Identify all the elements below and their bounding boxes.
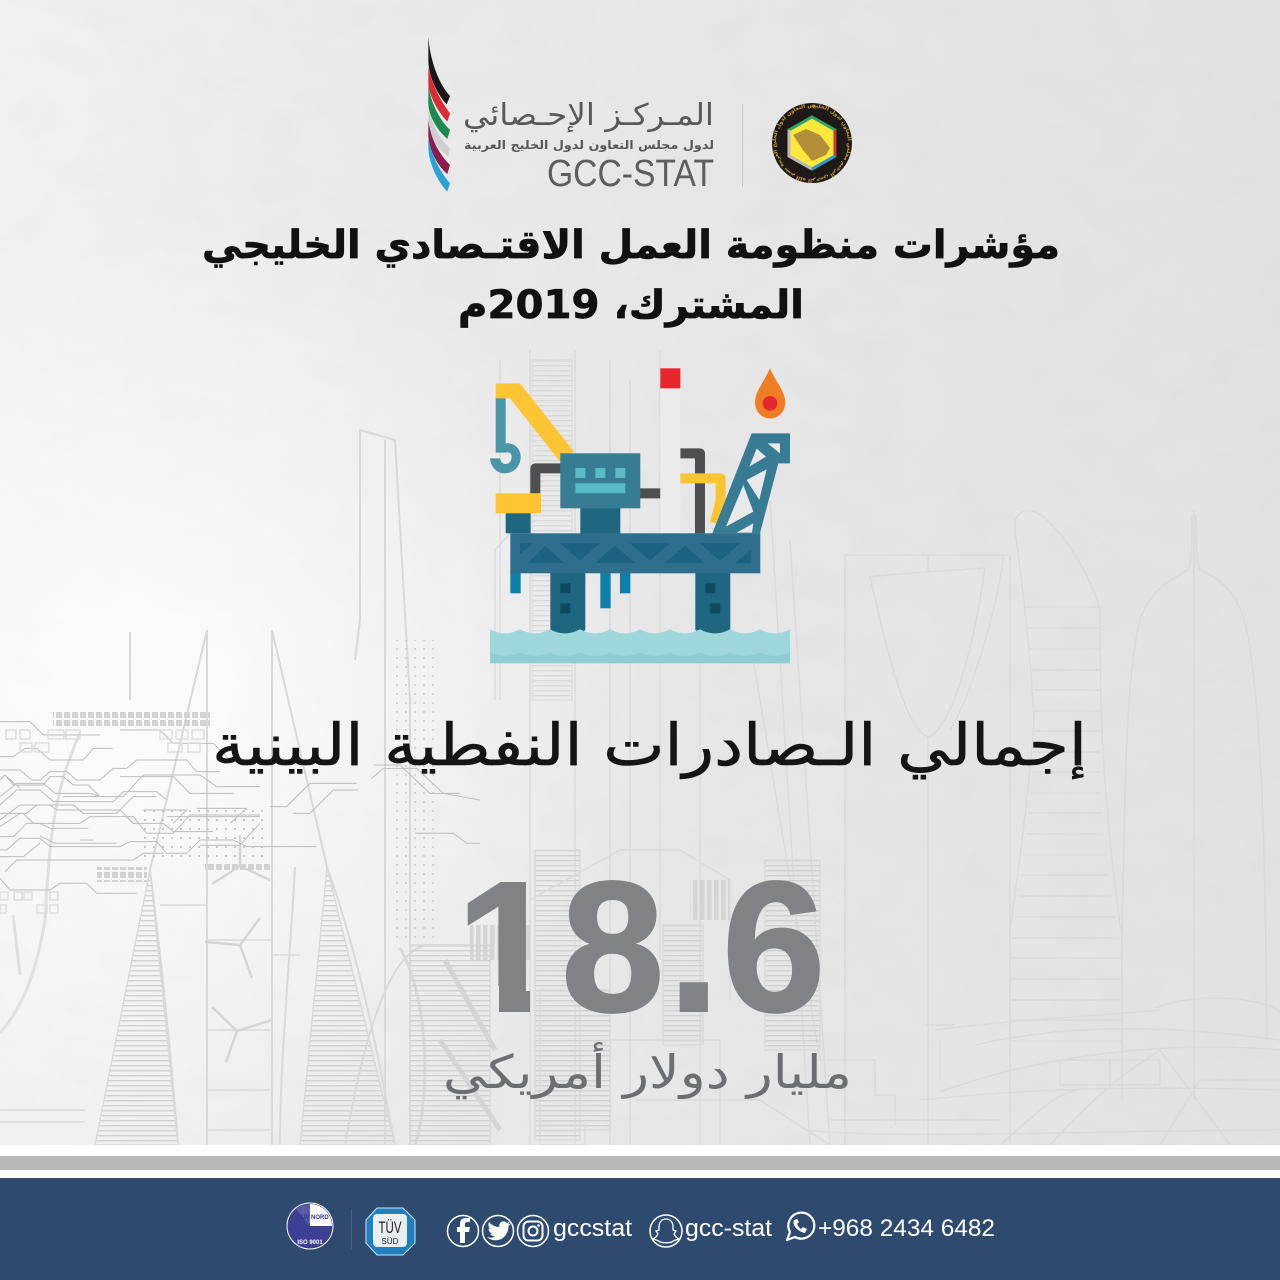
icon: grey pipes [535,453,700,533]
skyline: circuit solder pads [53,712,270,882]
title line 1: مؤشرات منظومة العمل الاقتـصادي الخليجي [202,223,1060,268]
icon: twitter [482,1216,514,1246]
badge: TUV Nord ISO 9001: TUV NORD [297,1215,329,1221]
skyline: torch tower [1010,511,1122,1100]
icon: sea [490,629,790,663]
icon: crane hook [490,398,521,473]
skyline: sail building [845,555,1010,1145]
heading: total intra-GCC oil exports: إجمالي الـصادرات النفطية البينية [212,711,1087,780]
icon: drill pipes [510,572,630,608]
icon: yellow tank [496,493,541,533]
header logo group [428,37,852,195]
title line 2: المشترك، 2019م [458,283,804,328]
logo: GCC emblem: مجلس التعاون لدول الخليج العربية بسم الله الرحمن الرحيم مجلس التعاون لدول الخليج [772,104,852,184]
icon: crane arm [496,383,574,462]
badge: TUV SUD: TÜV [378,1218,402,1237]
icon: derrick [712,433,790,533]
skyline: circuit board traces [0,722,480,893]
unit label: مليار دولار أمريكي [443,1042,852,1100]
big number: 18.6 [456,844,825,1051]
handle: gcc-stat: gcc-stat [685,1215,772,1242]
skyline: central towers [470,350,830,1145]
logo: Arabic organisation name: المـركـز الإحـصائي [463,98,714,133]
logo: Arabic sub-line: لدول مجلس التعاون لدول الخليج العربية [464,138,714,153]
icon: platform legs [550,572,730,634]
icon: chimney with red cap [660,368,680,533]
logo: GCC emblem [772,103,852,184]
icon: yellow pipe [680,478,721,523]
logo: GCC-STAT ribbon [428,37,450,192]
logo: GCC-STAT wordmark: GCC-STAT [547,153,714,195]
footer separators [0,1145,1280,1178]
skyline: wind turbines [205,835,272,1062]
background skyline illustration [0,350,1280,1145]
footer band [0,1178,1280,1280]
icon: instagram [518,1216,548,1246]
icon: whatsapp [787,1213,814,1240]
phone number: +968 2434 6482 [818,1215,995,1242]
icon: flame [755,368,785,419]
icon: snapchat [650,1215,682,1247]
title [202,223,1060,328]
skyline: domed tower [1122,510,1267,1100]
icon: platform deck [510,533,760,573]
badge: TUV SUD: SÜD [382,1237,399,1246]
icon: control cabin [560,453,640,535]
icon: offshore oil platform [490,368,790,663]
skyline: twin-sail towers left [0,630,395,1145]
skyline: lattice tower [345,430,500,1145]
icon: facebook [448,1216,478,1246]
skyline: circuit outline squares [0,730,204,913]
skyline: museum at lower right [805,998,1280,1145]
badge: TUV Nord ISO 9001: ISO 9001 [297,1240,323,1246]
handle: gccstat: gccstat [553,1215,632,1242]
badge: TUV Nord ISO 9001 [287,1203,333,1249]
badge: TUV SUD [366,1208,415,1255]
